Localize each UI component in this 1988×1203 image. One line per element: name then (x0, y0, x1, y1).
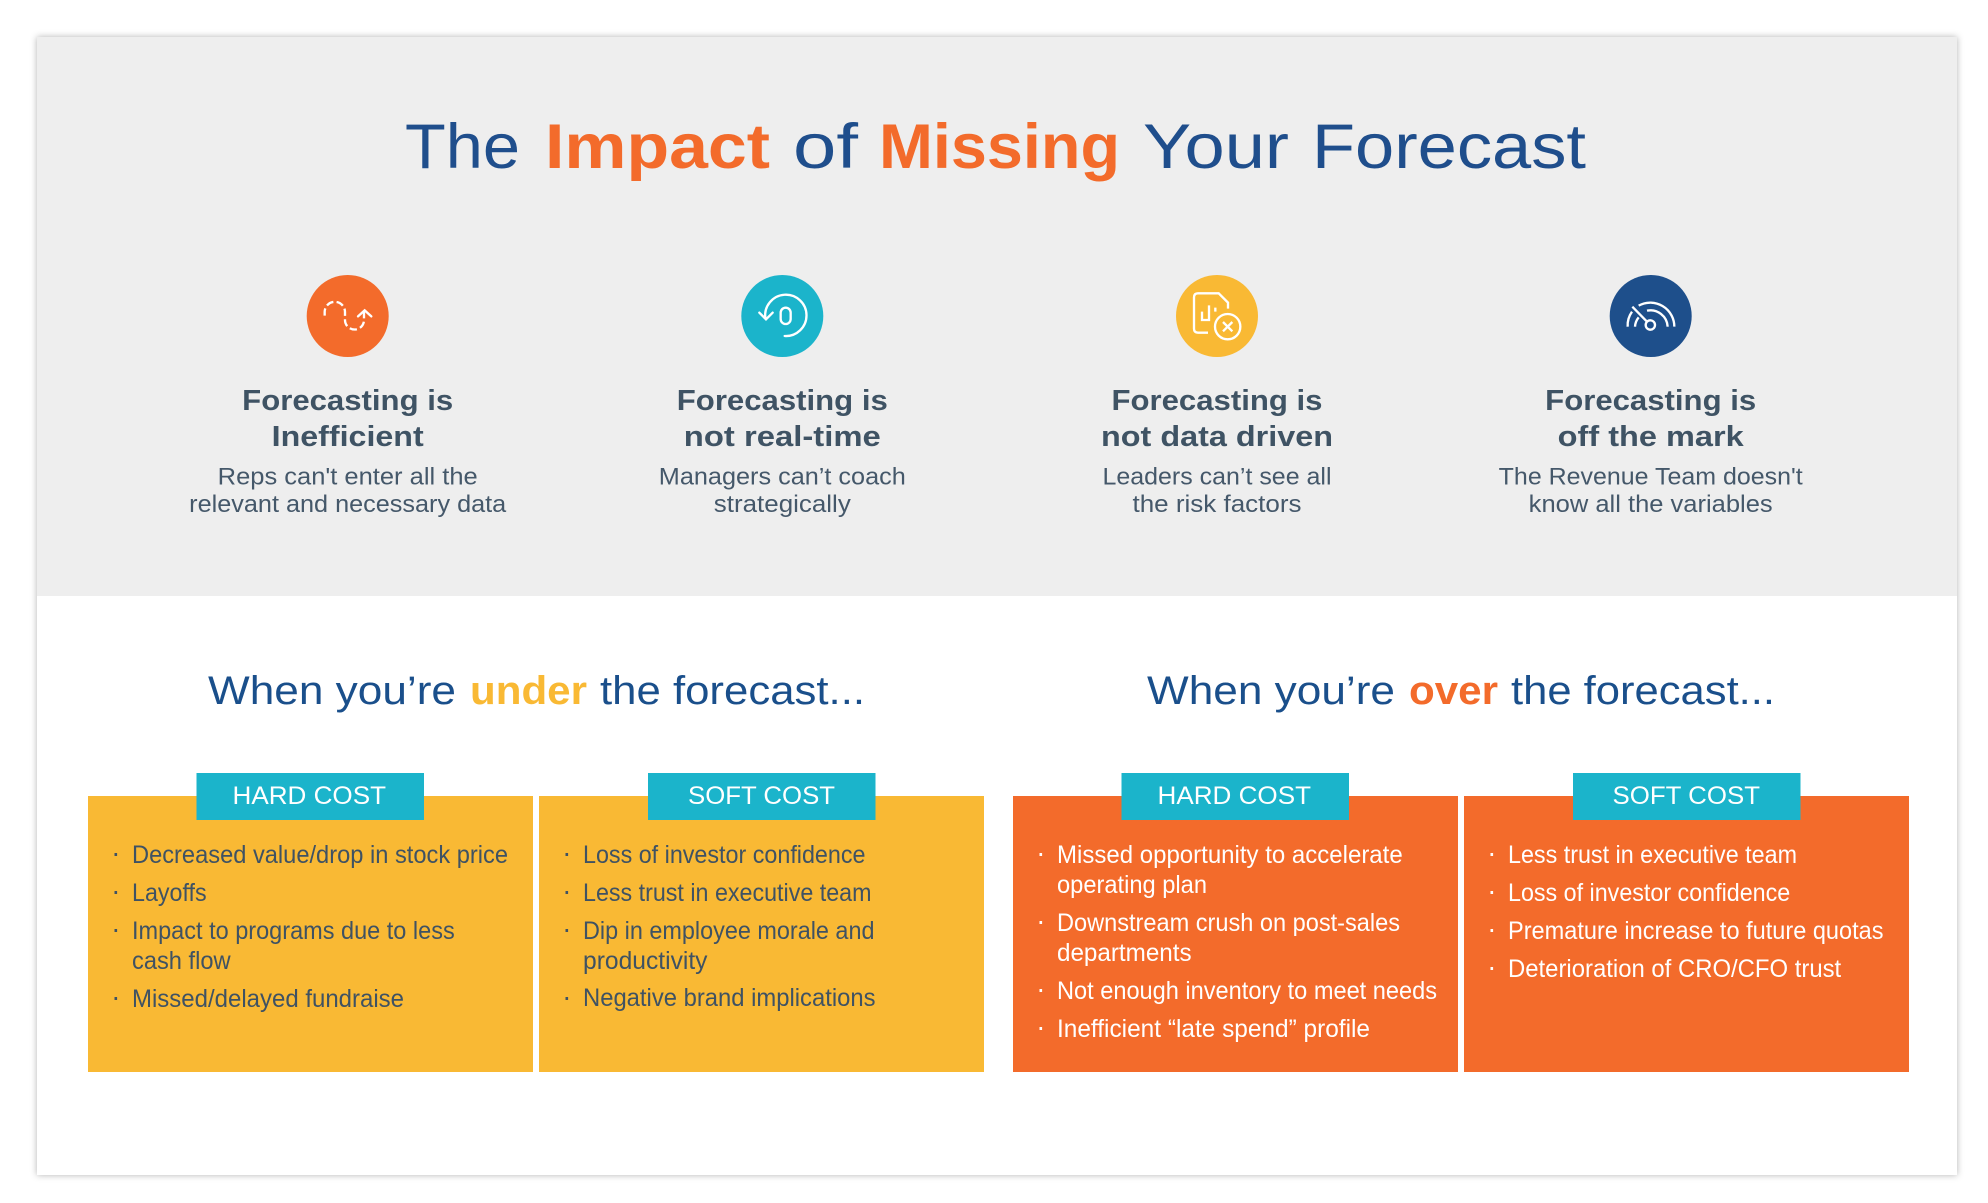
list: over soft costs: Loss of investor confidence (1508, 879, 1790, 907)
heading: over the forecast: the forecast... (1511, 669, 1775, 713)
heading: under the forecast: the forecast... (600, 669, 865, 713)
list: under soft costs: Loss of investor confidence (583, 841, 866, 869)
list: under hard costs: Missed/delayed fundraise (132, 985, 404, 1013)
icon: gauge (1610, 275, 1692, 357)
tag: soft cost (648, 773, 876, 820)
list: over hard costs: operating plan (1057, 871, 1207, 899)
list: under hard costs: Impact to programs due to less (132, 917, 455, 945)
tag: soft cost: SOFT COST (1612, 782, 1760, 810)
column: forecasting is not real-time (659, 275, 906, 518)
heading: under the forecast: under (470, 669, 587, 713)
list: over soft costs: Deterioration of CRO/CFO trust (1508, 955, 1841, 983)
description: The Revenue Team doesn't (1499, 464, 1803, 490)
list: over hard costs: Missed opportunity to accelerate (1057, 841, 1403, 869)
description: the risk factors (1132, 491, 1302, 518)
title: Your (1143, 112, 1289, 182)
description: relevant and necessary data (189, 491, 507, 518)
heading: Forecasting is (242, 385, 453, 417)
title: Missing (879, 112, 1120, 182)
heading: off the mark (1558, 421, 1745, 453)
list: over hard costs: Inefficient “late spend” profile (1057, 1015, 1370, 1043)
icon: dashed path with up arrow (307, 275, 389, 357)
heading: Forecasting is (677, 385, 888, 417)
tag: soft cost (1573, 773, 1800, 820)
list: under soft costs: Negative brand implications (583, 984, 876, 1012)
list: under hard costs: Decreased value/drop in stock price (132, 841, 508, 869)
heading: under the forecast: When you’re (208, 669, 456, 713)
heading: over the forecast: When you’re (1147, 669, 1395, 713)
tag: hard cost: HARD COST (1158, 782, 1311, 810)
list: over hard costs: Not enough inventory to meet needs (1057, 977, 1437, 1005)
heading: Forecasting is (1545, 385, 1756, 417)
list: over soft costs: Premature increase to future quotas (1508, 917, 1884, 945)
list: under soft costs: productivity (583, 947, 708, 975)
list: under hard costs: cash flow (132, 947, 231, 975)
title: of (793, 112, 859, 182)
title: Impact (545, 112, 770, 182)
panel: top gray band (37, 37, 1957, 596)
title: Forecast (1312, 112, 1587, 182)
title: The (405, 112, 520, 182)
description: Reps can't enter all the (218, 464, 478, 490)
icon: document with x (1176, 275, 1258, 357)
panel: over, soft cost (1464, 773, 1909, 1072)
list: under soft costs: Dip in employee morale and (583, 917, 874, 945)
column: forecasting is off the mark (1499, 275, 1803, 518)
list: under hard costs (114, 841, 508, 1013)
heading: over the forecast (1147, 669, 1775, 713)
tag: hard cost (196, 773, 424, 820)
heading: not real-time (684, 421, 881, 453)
column: forecasting is inefficient (189, 275, 507, 518)
tag: soft cost: SOFT COST (688, 782, 835, 810)
list: over hard costs (1040, 841, 1437, 1043)
heading: not data driven (1101, 421, 1333, 453)
title (405, 112, 1587, 182)
description: Managers can’t coach (659, 464, 906, 490)
heading: under the forecast (208, 669, 865, 713)
list: over hard costs: Downstream crush on post-sales (1057, 909, 1400, 937)
list: over soft costs (1490, 841, 1884, 983)
list: under hard costs: Layoffs (132, 879, 207, 907)
description: strategically (714, 491, 851, 518)
list: under soft costs: Less trust in executive team (583, 879, 872, 907)
description: Leaders can’t see all (1102, 464, 1332, 490)
list: over hard costs: departments (1057, 939, 1192, 967)
tag: hard cost (1122, 773, 1349, 820)
heading: over the forecast: over (1409, 669, 1498, 713)
panel: under, soft cost (539, 773, 984, 1072)
description: know all the variables (1529, 491, 1773, 518)
list: over soft costs: Less trust in executive team (1508, 841, 1797, 869)
panel: under, hard cost (88, 773, 533, 1072)
heading: Forecasting is (1112, 385, 1322, 417)
icon: rewind to zero (741, 275, 823, 357)
heading: Inefficient (272, 421, 424, 453)
tag: hard cost: HARD COST (232, 782, 386, 810)
list: under soft costs (566, 841, 876, 1012)
column: forecasting is not data driven (1101, 275, 1333, 518)
panel: over, hard cost (1013, 773, 1458, 1072)
